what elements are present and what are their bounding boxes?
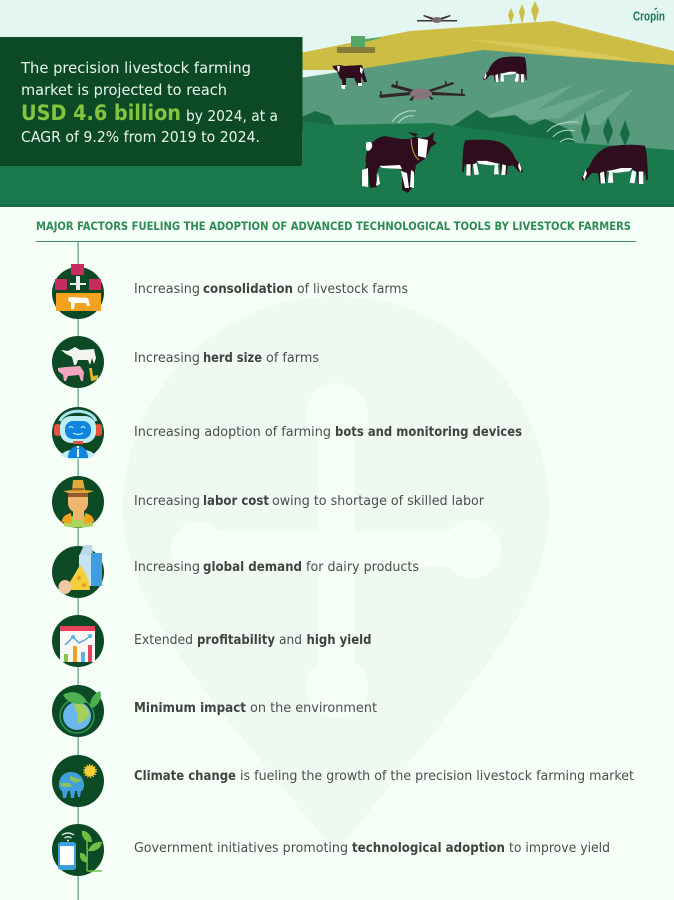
heading rule xyxy=(36,241,636,242)
yellow field xyxy=(0,21,674,75)
row 2 text: herd size xyxy=(203,351,262,366)
row 6 text: high yield xyxy=(306,633,372,648)
row 7 text: Minimum impact xyxy=(134,701,246,716)
stat text: by 2024, at a xyxy=(186,107,278,125)
stat text: CAGR of 9.2% from 2019 to 2024. xyxy=(21,128,260,146)
dark bushes xyxy=(300,110,576,146)
row 3 text xyxy=(134,425,522,440)
row 9 text xyxy=(134,841,610,856)
row 2 text xyxy=(134,351,319,366)
icon: herd xyxy=(52,336,104,388)
row 8 text: Climate change xyxy=(134,769,236,784)
row 9 text: to improve yield xyxy=(509,841,610,856)
stat text: The precision livestock farming xyxy=(20,59,251,77)
hero illustration xyxy=(0,0,674,207)
row 5 text: Increasing xyxy=(134,560,200,575)
row 9 text: technological adoption xyxy=(352,841,505,856)
cow small left xyxy=(332,65,367,89)
mid green field xyxy=(0,50,674,170)
stat text xyxy=(20,59,278,146)
row 5 text: for dairy products xyxy=(306,560,419,575)
row 5 text: global demand xyxy=(203,560,302,575)
sky xyxy=(0,0,674,207)
drone large xyxy=(379,81,465,101)
row 4 text: labor cost xyxy=(203,494,269,509)
row 1 text: consolidation xyxy=(203,282,293,297)
row 4 text xyxy=(134,494,485,509)
trees xyxy=(581,112,630,146)
icon: climate xyxy=(52,755,104,807)
row 4 text: owing to shortage of skilled labor xyxy=(272,494,485,509)
row 5 text xyxy=(134,560,419,575)
harvester xyxy=(337,36,381,53)
row 8 text: is fueling the growth of the precision livestock farming market xyxy=(240,769,634,784)
watermark: location pin xyxy=(123,296,549,848)
icon: dairy xyxy=(52,545,104,598)
row 7 text: on the environment xyxy=(250,701,377,716)
icon: consolidation xyxy=(52,264,104,319)
signal arcs xyxy=(392,111,578,142)
row 4 text: Increasing xyxy=(134,494,200,509)
icon: bot xyxy=(52,407,104,459)
row 3 text: Increasing adoption of farming xyxy=(134,425,331,440)
stat text: USD 4.6 billion xyxy=(21,101,181,126)
logo: Cropin xyxy=(633,10,665,24)
cow front xyxy=(360,132,437,193)
row 2 text: of farms xyxy=(266,351,319,366)
icon: chart xyxy=(52,615,104,667)
row 6 text: and xyxy=(279,633,302,648)
cow grazing right xyxy=(582,145,648,184)
stat panel xyxy=(0,37,302,166)
row 7 text xyxy=(134,701,377,716)
icon: farmer xyxy=(52,476,104,528)
row 3 text: bots and monitoring devices xyxy=(335,425,522,440)
timeline line xyxy=(78,241,79,900)
icon: government tech xyxy=(52,824,104,876)
row 1 text xyxy=(134,282,408,297)
icon: earth xyxy=(52,685,104,737)
stat text: market is projected to reach xyxy=(21,81,227,99)
row 9 text: Government initiatives promoting xyxy=(134,841,348,856)
dark green foreground xyxy=(0,121,674,207)
cow grazing top xyxy=(483,56,527,82)
drone small xyxy=(417,15,457,23)
row 2 text: Increasing xyxy=(134,351,200,366)
row 6 text xyxy=(134,633,372,648)
row 1 text: Increasing xyxy=(134,282,200,297)
row 6 text: profitability xyxy=(197,633,275,648)
cow grazing centre xyxy=(462,140,523,176)
row 1 text: of livestock farms xyxy=(297,282,408,297)
row 6 text: Extended xyxy=(134,633,193,648)
